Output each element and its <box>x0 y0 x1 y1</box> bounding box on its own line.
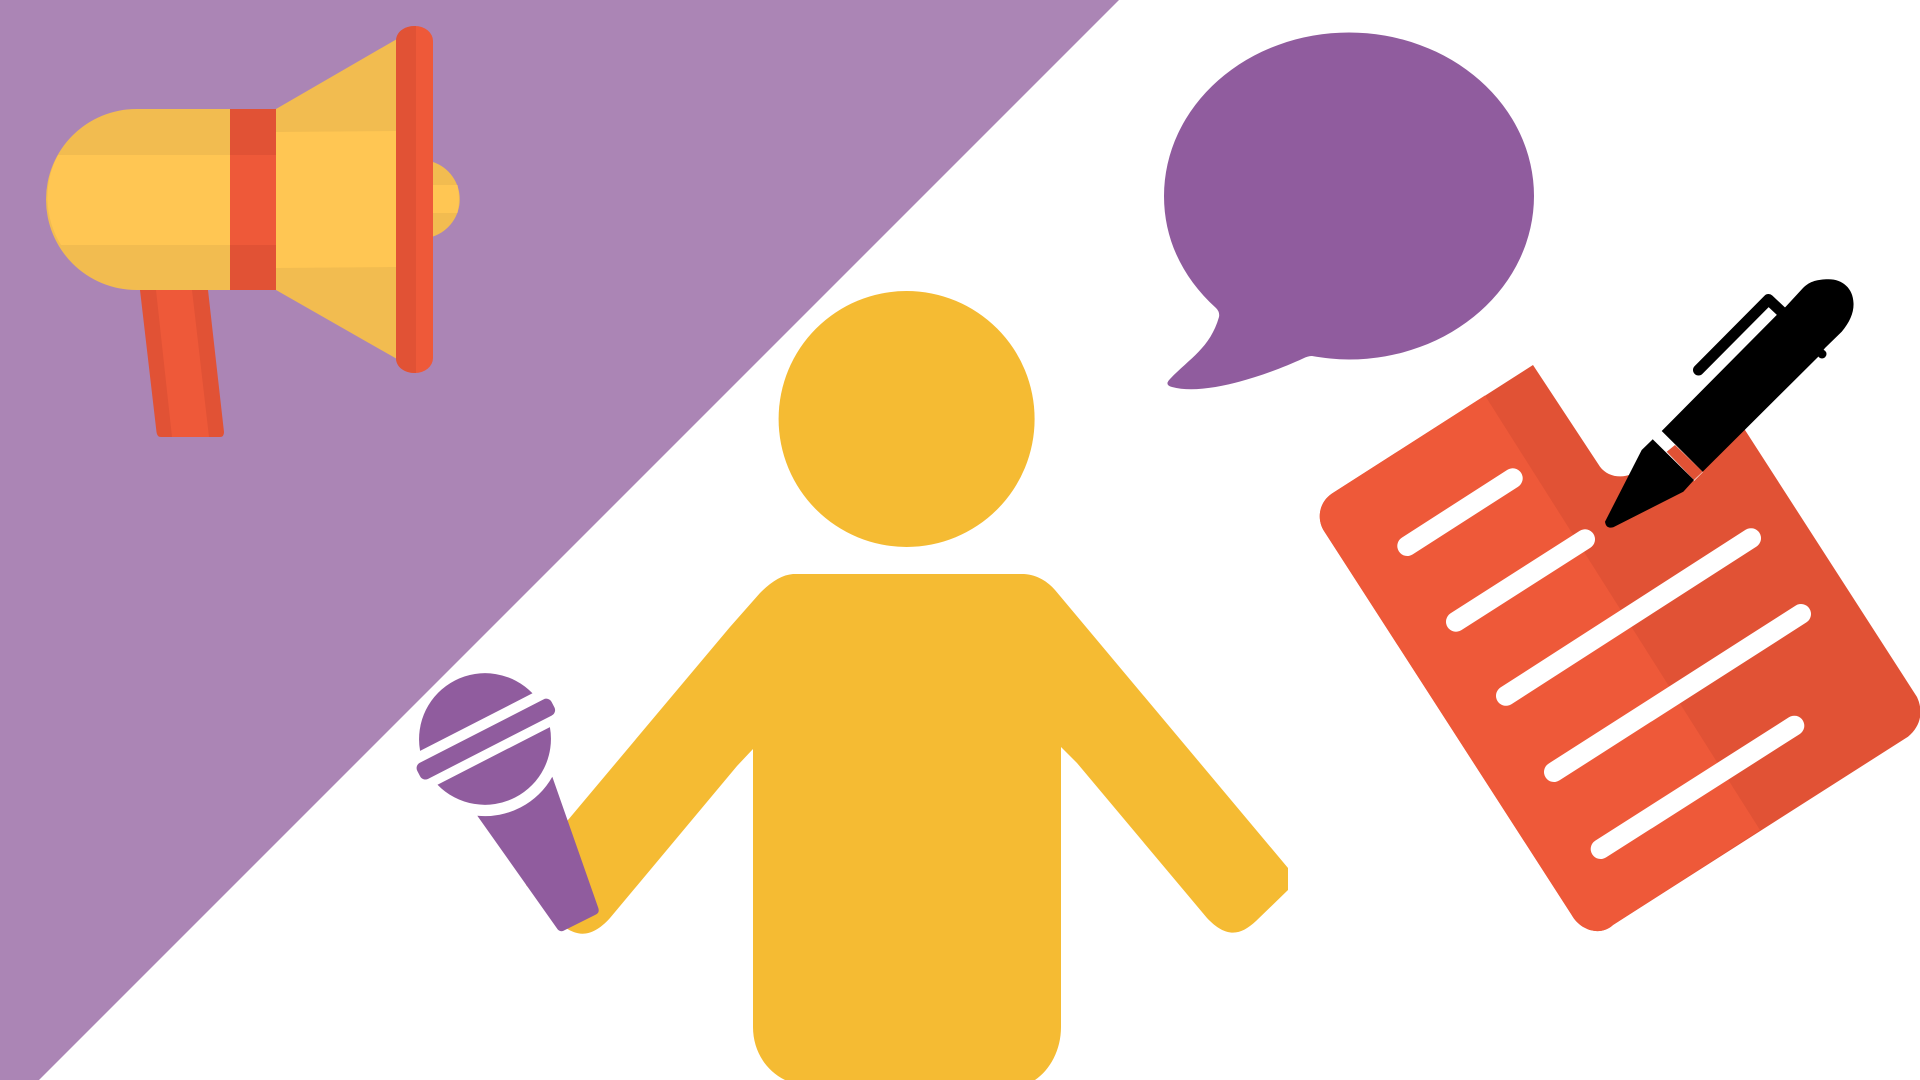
microphone head lower slice <box>438 727 551 805</box>
microphone head upper slice <box>419 673 532 751</box>
person head <box>779 291 1035 547</box>
megaphone rear knob <box>433 162 460 236</box>
icon: microphone <box>419 673 599 931</box>
person body <box>526 574 1288 1080</box>
microphone collar <box>423 705 549 774</box>
icon: megaphone <box>46 26 460 437</box>
person figure <box>526 291 1288 1080</box>
sheet light side <box>1320 396 1760 931</box>
megaphone rim <box>396 26 433 373</box>
megaphone cone <box>276 39 397 359</box>
speech bubble <box>1164 32 1534 389</box>
pen nib <box>1605 439 1694 528</box>
megaphone body <box>46 109 230 290</box>
pen gap over sheet <box>1652 431 1703 481</box>
sheet shadow side <box>1320 365 1920 931</box>
pen sheet sliver <box>1667 445 1703 480</box>
document sheet <box>1320 365 1920 931</box>
megaphone handle <box>140 290 224 437</box>
microphone handle <box>477 777 599 931</box>
background purple triangle <box>0 0 1119 1080</box>
megaphone collar band <box>230 109 276 290</box>
text lines on sheet <box>1407 478 1801 849</box>
pen clip <box>1698 300 1785 370</box>
pen nub <box>1818 350 1826 358</box>
icon: pen <box>1605 279 1854 528</box>
pen body <box>1662 279 1854 472</box>
